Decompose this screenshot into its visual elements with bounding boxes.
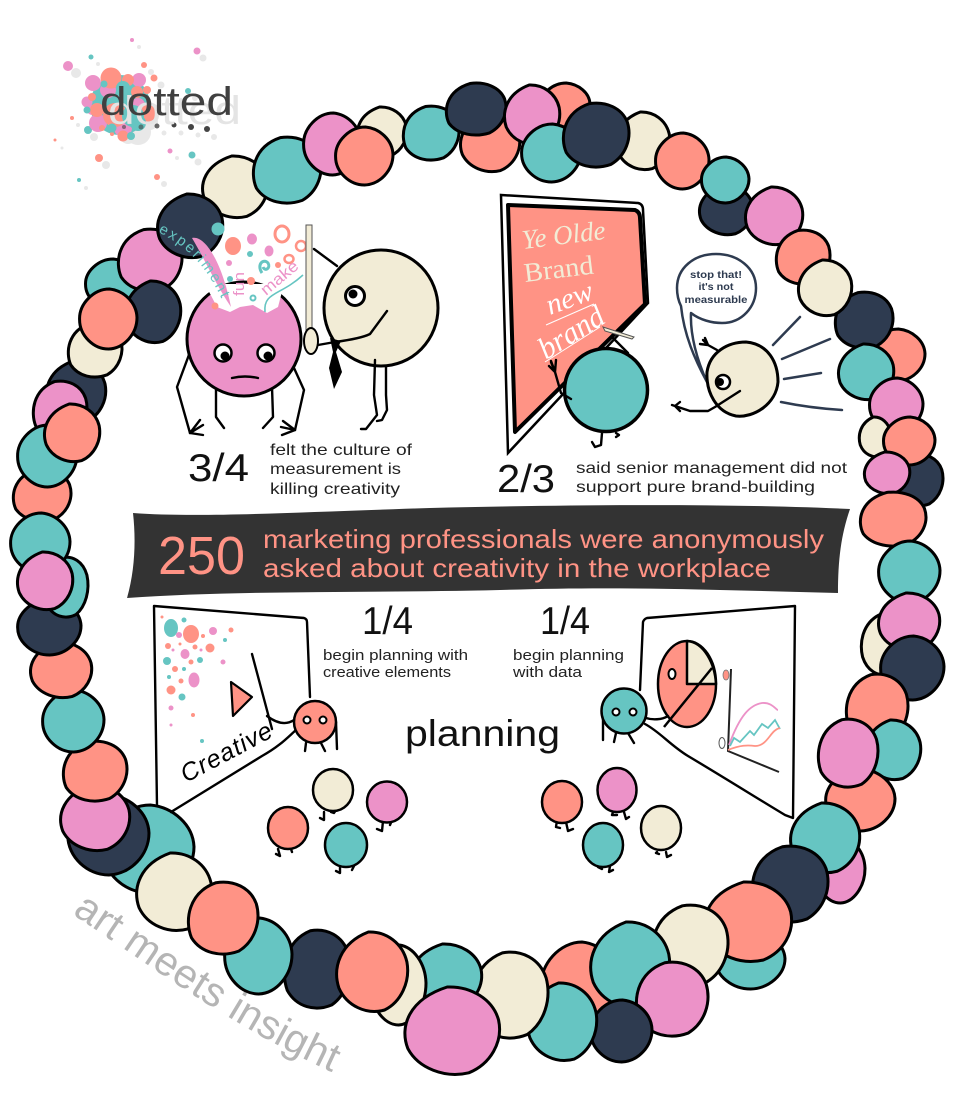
logo: dotted: dotted xyxy=(108,89,241,133)
heading: planning: planning xyxy=(405,713,560,754)
line chart xyxy=(719,669,780,772)
stat: 1/4 data: with data xyxy=(512,664,583,681)
audience xyxy=(268,769,407,873)
character: cream manager with ruler xyxy=(304,225,438,429)
creative burst from head xyxy=(160,222,306,312)
stat: 1/4 data: begin planning xyxy=(513,647,624,664)
stat: 3/4: 3/4 xyxy=(188,447,249,490)
stat: 2/3: 2/3 xyxy=(497,458,555,501)
logo: dotted xyxy=(54,38,241,190)
stat: 1/4 creative: 1/4 xyxy=(362,600,413,643)
creative burst from head: experiment xyxy=(160,226,230,298)
stat: 2/3: said senior management did not xyxy=(576,460,848,477)
character: cream manager shouting xyxy=(672,338,778,416)
pie chart xyxy=(658,641,716,727)
dots artwork xyxy=(160,616,234,743)
tagline: art meets insight: art meets insight xyxy=(75,900,340,1072)
board: Brand xyxy=(522,250,596,288)
stat: 2/3: support pure brand-building xyxy=(576,479,815,496)
scene: data presentation xyxy=(542,606,795,872)
stat: 1/4 creative: begin planning with xyxy=(323,647,468,664)
stat: 1/4 data xyxy=(512,600,624,681)
stat: 3/4 xyxy=(188,442,413,498)
presenter: coral xyxy=(267,701,337,751)
stat: 3/4: felt the culture of xyxy=(270,442,413,459)
scene: brand board xyxy=(501,195,842,453)
scene: measurement is killing creativity xyxy=(160,222,440,436)
board xyxy=(501,195,648,453)
motion lines xyxy=(773,317,842,410)
audience xyxy=(542,768,681,872)
speech bubble: measurable xyxy=(684,294,748,306)
creative burst from head: make xyxy=(258,258,302,299)
banner: 250 marketing professionals: asked about creativity in the workplace xyxy=(263,553,771,583)
pointer xyxy=(252,654,272,729)
whiteboard xyxy=(154,606,310,812)
banner: 250 marketing professionals: 250 xyxy=(158,526,245,586)
logo: dotted: dotted xyxy=(100,80,233,124)
board: Ye Olde xyxy=(520,215,607,255)
stat: 1/4 creative: creative elements xyxy=(323,664,451,681)
stat: 1/4 data: 1/4 xyxy=(540,600,590,643)
stat: 3/4: killing creativity xyxy=(270,481,400,498)
speech bubble: stop that! xyxy=(690,269,742,281)
handwritten label: Creative xyxy=(176,717,277,788)
whiteboard xyxy=(640,606,795,818)
board: brand xyxy=(531,298,611,366)
speech bubble xyxy=(677,254,756,382)
presenter: teal xyxy=(602,688,668,743)
stat: 1/4 creative xyxy=(323,600,468,681)
banner: 250 marketing professionals: marketing professionals were anonymously xyxy=(263,524,824,554)
scene: creative presentation xyxy=(154,606,407,873)
banner: 250 marketing professionals xyxy=(127,505,850,598)
character: sad pink creative xyxy=(177,282,304,435)
speech bubble: it's not xyxy=(698,281,734,293)
character: teal painter xyxy=(549,327,648,447)
creative burst from head: fun xyxy=(231,272,248,296)
play icon xyxy=(231,682,252,716)
stat: 2/3 xyxy=(497,458,848,501)
stat: 3/4: measurement is xyxy=(270,461,401,478)
board: new xyxy=(541,275,598,322)
